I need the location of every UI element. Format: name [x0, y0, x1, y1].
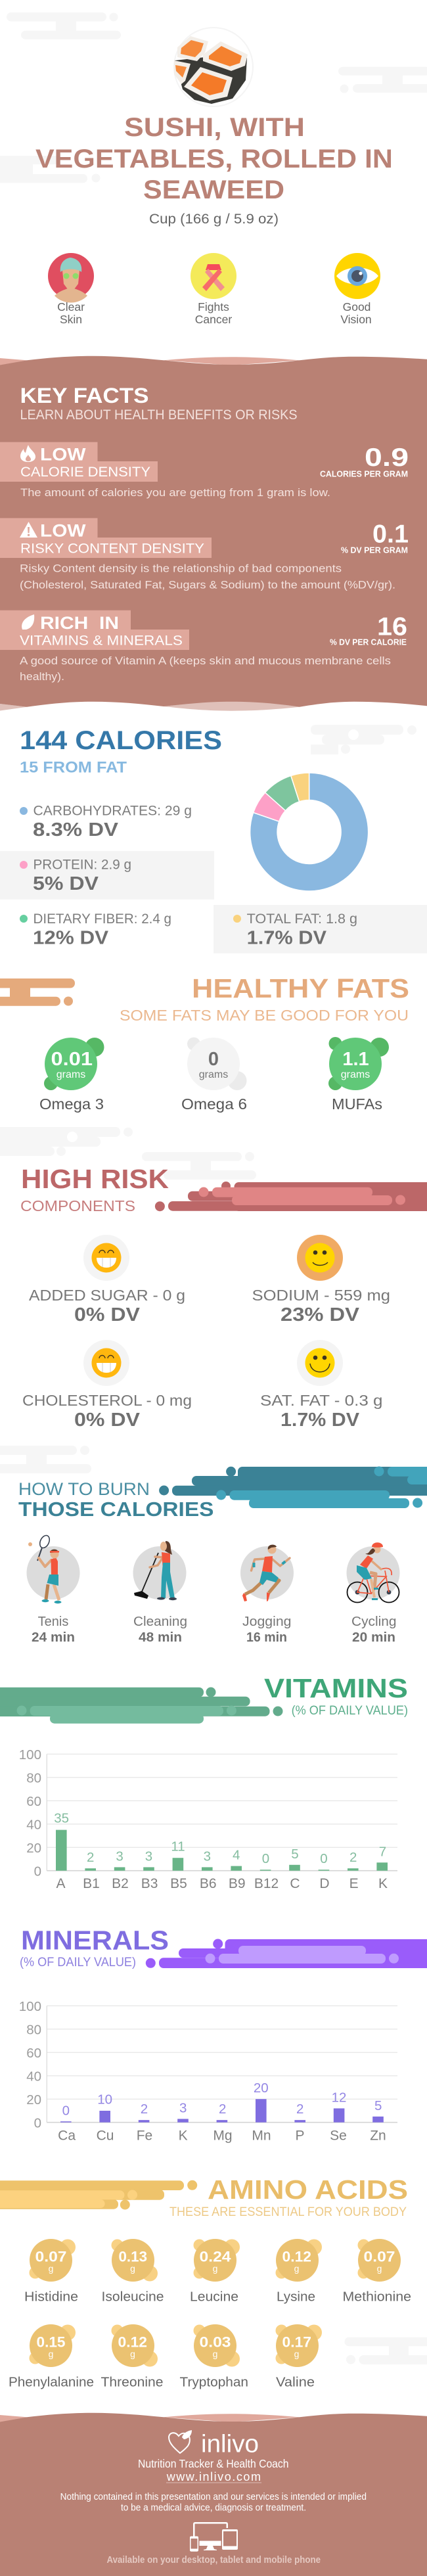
chart: vitamins bar chart: 4 [233, 1848, 240, 1863]
chart: vitamins bar chart [19, 1747, 397, 1891]
amino acid: lysine: g [294, 2263, 299, 2274]
amino acid: lysine: Lysine [277, 2290, 315, 2305]
benefit: clear skin [48, 253, 94, 326]
legend: protein [20, 858, 131, 894]
chart: vitamins bar chart: 3 [204, 1849, 211, 1864]
chart: vitamins bar chart: 0 [320, 1851, 328, 1866]
legend: dietary fiber: 12% DV [33, 928, 109, 949]
amino acid: lysine: 0.12 [282, 2249, 311, 2265]
description: A good source of Vitamin A (keeps skin and mucous membrane cells [20, 655, 391, 667]
panel: protein background [0, 851, 214, 900]
title: SEAWEED [143, 175, 284, 204]
label: vitamins and minerals: VITAMINS & MINERALS [20, 633, 183, 649]
chart: vitamins bar chart: 3 [116, 1849, 124, 1864]
fact: low calorie density [0, 442, 409, 499]
label: Clear [57, 300, 85, 313]
chart: minerals bar chart: Cu [97, 2128, 114, 2144]
description: healthy). [20, 670, 64, 683]
activity label: tennis: 24 min [32, 1630, 75, 1645]
legend: protein: 5% DV [33, 873, 99, 894]
amino acid: methionine: Methionine [343, 2290, 411, 2305]
amino acid: phenylalanine: 0.15 [37, 2334, 66, 2351]
description: Risky Content density is the relationship of bad components [20, 563, 342, 575]
chart: vitamins bar chart: 2 [349, 1850, 357, 1865]
subheading: from fat: 15 FROM FAT [20, 759, 127, 777]
activity label: cycling: 20 min [352, 1630, 395, 1645]
label: Skin [60, 313, 82, 326]
component: cholesterol [22, 1340, 192, 1431]
chart: vitamins bar chart: C [290, 1876, 300, 1891]
metric: 0.1: 0.1 [372, 520, 409, 549]
metric unit: CALORIES PER GRAM [320, 469, 408, 479]
chart: minerals bar chart: 10 [97, 2092, 112, 2107]
chart: minerals bar chart: Ca [58, 2128, 76, 2144]
subheading: components: COMPONENTS [20, 1197, 135, 1214]
component: cholesterol: CHOLESTEROL - 0 mg [22, 1392, 192, 1409]
fat: omega 6: Omega 6 [181, 1095, 247, 1113]
fat: mufas: grams [341, 1069, 370, 1080]
chart: vitamins bar chart: B2 [112, 1876, 129, 1891]
legend: total fat: 1.7% DV [247, 928, 327, 949]
chart: vitamins bar chart: 35 [54, 1811, 69, 1826]
fact: rich in vitamins and minerals [0, 610, 407, 683]
serving size: Cup (166 g / 5.9 oz) [149, 212, 279, 227]
chart: minerals bar chart: Mn [252, 2128, 271, 2144]
chart: vitamins bar chart: B12 [254, 1876, 279, 1891]
tagline: Nutrition Tracker & Health Coach [138, 2457, 289, 2470]
amino acid: phenylalanine [9, 2324, 94, 2390]
heading: those calories: THOSE CALORIES [18, 1498, 214, 1521]
label: Vision [340, 313, 372, 326]
heading: healthy fats: HEALTHY FATS [192, 973, 409, 1003]
heading: amino acids: AMINO ACIDS [208, 2174, 408, 2205]
chart: minerals bar chart: 2 [141, 2102, 148, 2117]
subheading: vitamins: (% OF DAILY VALUE) [292, 1703, 408, 1718]
component: saturated fat: SAT. FAT - 0.3 g [260, 1392, 382, 1409]
disclaimer: Nothing contained in this presentation and our services is intended or implied [60, 2491, 367, 2502]
panel: footer [0, 2413, 427, 2576]
chart: vitamins bar chart: 7 [379, 1844, 386, 1859]
chart: vitamins bar chart: 2 [87, 1850, 94, 1865]
legend: total fat [233, 911, 357, 949]
panel: total fat background [214, 905, 427, 954]
heading: high risk: HIGH RISK [21, 1164, 169, 1194]
description [20, 655, 391, 683]
chart: minerals bar chart: 20 [254, 2081, 269, 2096]
chart: vitamins bar chart: A [56, 1876, 66, 1891]
component: saturated fat: 1.7% DV [281, 1410, 360, 1431]
amino acid: methionine [343, 2239, 411, 2305]
chart: minerals bar chart: P [295, 2128, 305, 2144]
subheading: amino acids: THESE ARE ESSENTIAL FOR YOUR BODY [169, 2205, 407, 2219]
legend: carbohydrates: CARBOHYDRATES: 29 g [33, 804, 192, 819]
chart: vitamins bar chart: B1 [83, 1876, 100, 1891]
chart: minerals bar chart: K [179, 2128, 188, 2144]
title: SUSHI, WITH [124, 113, 305, 142]
logo: inlivo: inlivo [201, 2431, 259, 2458]
chart: vitamins bar chart: B5 [170, 1876, 187, 1891]
chart: vitamins bar chart: B9 [229, 1876, 246, 1891]
amino acid: tryptophan: Tryptophan [180, 2376, 248, 2390]
chart: vitamins bar chart: E [349, 1876, 359, 1891]
chart: vitamins bar chart: 100 [19, 1747, 41, 1762]
activity: jogging [240, 1545, 294, 1601]
heading: minerals: MINERALS [21, 1925, 169, 1956]
title [35, 113, 393, 204]
component: added sugar [29, 1235, 185, 1325]
amino acid: threonine: 0.12 [118, 2334, 147, 2351]
chart: vitamins bar chart: 80 [26, 1770, 41, 1786]
chart: vitamins bar chart: B3 [141, 1876, 158, 1891]
chart: minerals bar chart: 5 [374, 2098, 382, 2113]
legend: carbohydrates: 8.3% DV [33, 819, 119, 840]
amino acid: methionine: g [377, 2263, 382, 2274]
availability note: Available on your desktop, tablet and mobile phone [106, 2555, 321, 2565]
amino acid: lysine [276, 2239, 322, 2305]
amino acid: phenylalanine: Phenylalanine [9, 2376, 94, 2390]
chart: minerals bar chart: 12 [332, 2090, 346, 2105]
fat: omega 3: grams [56, 1069, 85, 1080]
label: Fights [198, 300, 229, 313]
amino acid: valine: 0.17 [282, 2334, 311, 2351]
activity label: jogging: Jogging [242, 1615, 292, 1629]
fat: mufas: MUFAs [332, 1095, 382, 1113]
amino acid: histidine: Histidine [24, 2290, 78, 2305]
legend: total fat: TOTAL FAT: 1.8 g [247, 911, 357, 927]
amino acid: methionine: 0.07 [364, 2249, 395, 2265]
chart: vitamins bar chart: D [319, 1876, 330, 1891]
activity label: cycling: Cycling [351, 1615, 397, 1629]
chart: vitamins bar chart: 0 [34, 1864, 41, 1879]
chart: minerals bar chart: 2 [296, 2102, 303, 2117]
chart: minerals bar chart: 0 [34, 2116, 41, 2130]
label: rich in: RICH IN [40, 613, 119, 633]
label: Cancer [195, 313, 232, 326]
chart: vitamins bar chart: 11 [171, 1839, 185, 1854]
amino acid: threonine: g [130, 2349, 135, 2359]
activity label: tennis: Tenis [38, 1615, 68, 1629]
amino acid: histidine: g [49, 2263, 53, 2274]
component: sodium: SODIUM - 559 mg [252, 1287, 390, 1304]
amino acid: isoleucine: g [130, 2263, 135, 2274]
amino acid: leucine: 0.24 [200, 2249, 231, 2265]
activity label: cycling [351, 1615, 397, 1645]
chart: vitamins bar chart: 20 [26, 1841, 41, 1856]
website: www.inlivo.com [166, 2470, 261, 2483]
chart: minerals bar chart: Se [330, 2128, 347, 2144]
legend: dietary fiber: DIETARY FIBER: 2.4 g [33, 911, 171, 927]
activity label: jogging: 16 min [246, 1630, 287, 1645]
fat: mufas [328, 1037, 389, 1113]
benefit: fights cancer [191, 253, 236, 326]
icon: racket [37, 1534, 51, 1561]
icon: bicycle [347, 1568, 399, 1602]
activity label: cleaning [133, 1615, 187, 1645]
fat: omega 6: grams [199, 1069, 228, 1080]
activity: tennis [26, 1534, 80, 1603]
description [20, 563, 395, 591]
disclaimer [60, 2491, 367, 2514]
amino acid: tryptophan: g [213, 2349, 217, 2359]
label: low: LOW [40, 445, 86, 465]
amino acid: phenylalanine: g [49, 2349, 53, 2359]
icon: leaf [22, 614, 34, 630]
activity: cleaning [133, 1541, 187, 1600]
disclaimer: to be a medical advice, diagnosis or treatment. [121, 2502, 306, 2514]
benefit: good vision [334, 253, 380, 326]
label [195, 300, 232, 326]
amino acid: isoleucine: 0.13 [118, 2249, 147, 2265]
chart: vitamins bar chart: B6 [200, 1876, 217, 1891]
label: Good [343, 300, 371, 313]
activity label: tennis [32, 1615, 75, 1645]
label [340, 300, 372, 326]
chart: vitamins bar chart: K [378, 1876, 388, 1891]
icon: devices [190, 2522, 238, 2552]
fat: mufas: 1.1 [342, 1049, 369, 1070]
chart: minerals bar chart: Mg [213, 2128, 233, 2144]
amino acid: histidine: 0.07 [35, 2249, 67, 2265]
heading: calories: 144 CALORIES [20, 726, 222, 755]
icon: broom [134, 1553, 158, 1599]
heading: how to burn: HOW TO BURN [18, 1479, 150, 1499]
title: VEGETABLES, ROLLED IN [35, 145, 393, 173]
component: saturated fat [260, 1340, 382, 1431]
activity label: cleaning: Cleaning [133, 1615, 187, 1629]
chart: macronutrient donut [250, 773, 369, 891]
chart: vitamins bar chart: 0 [262, 1851, 269, 1866]
chart: vitamins bar chart: 3 [145, 1849, 152, 1864]
chart: minerals bar chart: 100 [19, 1999, 41, 2014]
panel: key facts [0, 356, 427, 711]
chart: minerals bar chart: 80 [26, 2023, 41, 2037]
chart: minerals bar chart: 40 [26, 2069, 41, 2084]
fat: omega 3: Omega 3 [39, 1095, 104, 1113]
metric: 0.9: 0.9 [365, 444, 409, 472]
fat: omega 3 [39, 1038, 104, 1113]
chart: vitamins bar chart: 5 [291, 1847, 299, 1862]
component: added sugar: ADDED SUGAR - 0 g [29, 1287, 185, 1304]
logo: inlivo [169, 2430, 259, 2458]
fact: low risky content density [0, 518, 409, 591]
amino acid: isoleucine: Isoleucine [101, 2290, 164, 2305]
heading: vitamins: VITAMINS [264, 1673, 408, 1703]
image: sushi rolls [174, 28, 253, 106]
amino acid: threonine: Threonine [101, 2376, 163, 2390]
component: added sugar: 0% DV [74, 1304, 141, 1325]
activity label: cleaning: 48 min [139, 1630, 182, 1645]
legend: carbohydrates [20, 804, 192, 840]
description: (Cholesterol, Saturated Fat, Sugars & Sodium) to the amount (%DV/gr). [20, 579, 395, 591]
chart: minerals bar chart: Fe [137, 2128, 152, 2144]
subheading: healthy fats: SOME FATS MAY BE GOOD FOR YOU [120, 1007, 409, 1024]
chart: minerals bar chart: 0 [62, 2103, 70, 2119]
amino acid: leucine: Leucine [190, 2290, 238, 2305]
activity: cycling [347, 1542, 399, 1602]
amino acid: leucine: g [213, 2263, 217, 2274]
label: low: LOW [40, 521, 86, 541]
amino acid: valine [276, 2324, 322, 2390]
subheading: LEARN ABOUT HEALTH BENEFITS OR RISKS [20, 407, 297, 423]
icon: warning [20, 522, 37, 538]
chart: minerals bar chart: 2 [219, 2102, 226, 2117]
amino acid: leucine [190, 2239, 240, 2305]
fat: omega 6 [181, 1037, 247, 1113]
amino acid: tryptophan: 0.03 [200, 2334, 231, 2351]
legend: protein: PROTEIN: 2.9 g [33, 858, 131, 873]
metric unit: % DV PER GRAM [341, 545, 408, 555]
chart: vitamins bar chart: 40 [26, 1818, 41, 1832]
amino acid: isoleucine [101, 2239, 164, 2305]
chart: minerals bar chart: 3 [179, 2100, 187, 2115]
amino acid: histidine [24, 2239, 78, 2305]
chart: minerals bar chart: Zn [370, 2128, 386, 2144]
chart: minerals bar chart [19, 1999, 397, 2144]
component: sodium: 23% DV [281, 1304, 360, 1325]
label [57, 300, 85, 326]
metric: 16: 16 [377, 613, 407, 641]
amino acid: valine: Valine [276, 2376, 315, 2390]
amino acid: valine: g [294, 2349, 299, 2359]
amino acid: tryptophan [180, 2324, 248, 2390]
chart: minerals bar chart: 60 [26, 2046, 41, 2061]
activity label: jogging [242, 1615, 292, 1645]
amino acid: threonine [101, 2324, 163, 2390]
component: sodium [252, 1235, 390, 1325]
label: calorie density: CALORIE DENSITY [20, 464, 150, 480]
metric unit: % DV PER CALORIE [330, 637, 407, 647]
chart: vitamins bar chart: 60 [26, 1794, 41, 1809]
fat: omega 6: 0 [208, 1049, 219, 1070]
subheading: minerals: (% OF DAILY VALUE) [20, 1955, 136, 1969]
icon: flame [20, 445, 35, 462]
heading: key facts: KEY FACTS [20, 384, 148, 407]
description: The amount of calories you are getting from 1 gram is low. [20, 486, 330, 499]
component: cholesterol: 0% DV [74, 1410, 141, 1431]
legend: dietary fiber [20, 911, 171, 949]
chart: minerals bar chart: 20 [26, 2092, 41, 2107]
fat: omega 3: 0.01 [51, 1049, 93, 1070]
label: risky content density: RISKY CONTENT DENSITY [20, 541, 204, 557]
